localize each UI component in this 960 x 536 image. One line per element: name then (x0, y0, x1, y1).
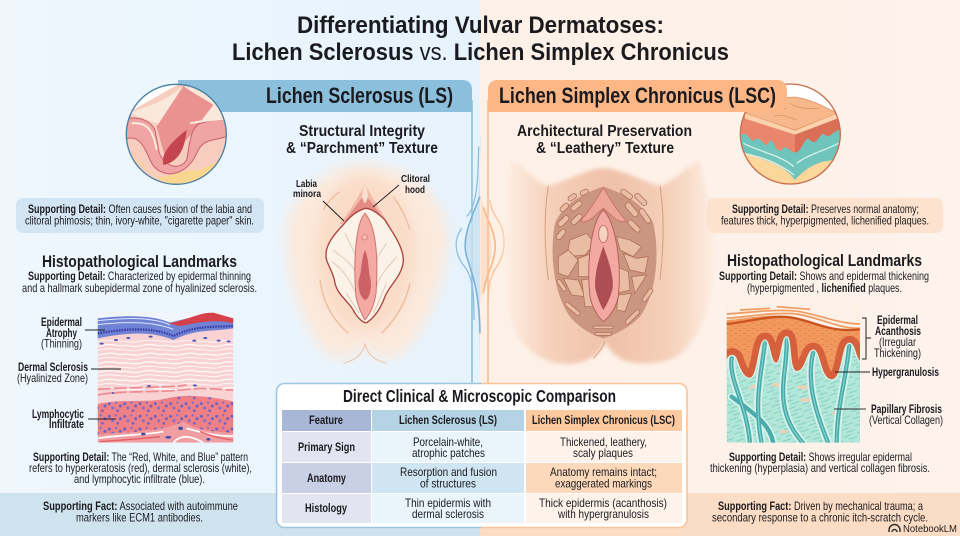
table row: anatomy: exaggerated markings (555, 476, 652, 490)
text block: hyperplasia detail: Supporting Detail: Shows irregular epidermal (729, 450, 912, 464)
table row: histology: with hypergranulosis (557, 507, 649, 521)
table row: histology: dermal sclerosis (412, 507, 484, 521)
labels: labia minora and clitoral hood: Clitoral (401, 173, 430, 185)
background: left blue half (0, 0, 480, 536)
table row: primary sign: Thickened, leathery, (560, 435, 647, 449)
text block: red white and blue pattern (29, 450, 252, 486)
table header row: Lichen Simplex Chronicus (LSC) (532, 413, 675, 427)
callout: LSC supporting detail (707, 198, 943, 233)
icon: Lichen Simplex Chronicus tissue circle (740, 84, 842, 187)
heading: LSC histopathological landmarks: (hyperpigmented , lichenified plaques. (747, 281, 902, 295)
labels: LS histology callouts: Lymphocytic (32, 407, 84, 421)
table row: primary sign: Porcelain-white, (413, 435, 483, 449)
labels: labia minora and clitoral hood (293, 173, 430, 221)
subheading: parchment texture: & “Parchment” Texture (286, 140, 438, 157)
background: right peach half (480, 0, 960, 536)
labels: LS histology callouts: Dermal Sclerosis (18, 360, 88, 374)
header: Lichen Simplex Chronicus: Lichen Simplex Chronicus (LSC) (499, 83, 776, 108)
illustration: Lichen Sclerosus anatomy schematic (286, 163, 447, 363)
labels: LS histology callouts: Infiltrate (49, 417, 84, 431)
table row: anatomy: of structures (420, 476, 476, 490)
subheading: parchment texture: Structural Integrity (299, 123, 425, 140)
illustration: Lichen Simplex Chronicus anatomy schematic (505, 160, 715, 364)
centre divider waves (456, 137, 504, 367)
title: Differentiating Vulvar Dermatoses: (297, 12, 664, 39)
table title: Direct Clinical & Microscopic Comparison (343, 386, 616, 406)
chart: LS histology section (98, 313, 233, 443)
table row: primary sign (282, 432, 682, 462)
text block: red white and blue pattern: refers to hyperkeratosis (red), dermal sclerosis (white), (29, 461, 252, 475)
table row: histology (282, 494, 682, 523)
text block: LS supporting fact: markers like ECM1 antibodies. (76, 510, 203, 524)
text block: LSC supporting fact (712, 499, 928, 524)
labels: LS histology callouts: (Thinning) (41, 336, 82, 350)
text block: red white and blue pattern: Supporting Detail: The “Red, White, and Blue” pattern (33, 450, 248, 464)
heading: LS histopathological landmarks: Histopathological Landmarks (42, 252, 237, 271)
footer band: Lichen Sclerosus (0, 493, 480, 536)
table row: histology: Thin epidermis with (405, 496, 491, 510)
text block: hyperplasia detail (710, 450, 930, 475)
table row: anatomy: Resorption and fusion (400, 465, 497, 479)
callout: LS supporting detail: Supporting Detail: Often causes fusion of the labia and (28, 202, 252, 216)
table row: anatomy (282, 463, 682, 493)
text block: LS supporting fact (43, 499, 238, 524)
labels: labia minora and clitoral hood: hood (405, 184, 425, 196)
icon: Lichen Sclerosus tissue circle (123, 83, 230, 187)
text block: LSC supporting fact: Supporting Fact: Driven by mechanical trauma; a (718, 499, 923, 513)
callout: LSC supporting detail: Supporting Detail: Preserves normal anatomy; (732, 202, 919, 216)
table row: primary sign: atrophic patches (412, 446, 485, 460)
heading: LSC histopathological landmarks (719, 251, 929, 295)
subheading: leathery texture: & “Leathery” Texture (536, 140, 674, 157)
table row: anatomy: Anatomy (307, 471, 346, 485)
panel: Lichen Simplex Chronicus centre (488, 80, 787, 384)
title (232, 12, 729, 66)
panel: Lichen Sclerosus centre (178, 80, 472, 384)
table row: primary sign: Primary Sign (298, 440, 355, 454)
labels: LSC histology callouts: Acanthosis (875, 324, 921, 338)
labels: LS histology callouts: Atrophy (46, 326, 77, 340)
labels: labia minora and clitoral hood: Labia (296, 178, 317, 190)
header: Lichen Simplex Chronicus (488, 80, 787, 112)
chart: LSC histology section (727, 305, 860, 443)
title: Lichen Sclerosus vs. Lichen Simplex Chronicus (232, 39, 729, 66)
labels: labia minora and clitoral hood: minora (293, 188, 321, 200)
text block: LS supporting fact: Supporting Fact: Associated with autoimmune (43, 499, 238, 513)
subheading: leathery texture (517, 123, 692, 157)
footer band: Lichen Simplex Chronicus (480, 493, 960, 536)
panel: comparison table (276, 384, 687, 528)
heading: LS histopathological landmarks (22, 252, 257, 295)
subheading: leathery texture: Architectural Preservation (517, 123, 692, 140)
labels: LS histology callouts: Epidermal (41, 315, 82, 329)
table row: histology: Histology (305, 501, 347, 515)
subheading: parchment texture (286, 123, 438, 157)
heading: LS histopathological landmarks: Supporting Detail: Characterized by epidermal thinning (28, 269, 251, 283)
table row: primary sign: scaly plaques (573, 446, 633, 460)
labels: LS histology callouts: (Hyalinized Zone) (17, 371, 88, 385)
table header row: Feature (309, 413, 343, 427)
table row: anatomy: Anatomy remains intact; (550, 465, 657, 479)
labels: LSC histology callouts (834, 313, 943, 427)
labels: LSC histology callouts: Thickening) (874, 346, 921, 360)
labels: LS histology callouts (17, 315, 121, 431)
table row: histology: Thick epidermis (acanthosis) (539, 496, 667, 510)
table header row (282, 410, 682, 431)
heading: LS histopathological landmarks: and a hallmark subepidermal zone of hyalinized sclerosis. (22, 281, 257, 295)
text block: red white and blue pattern: and lymphocytic infiltrate (blue). (74, 472, 205, 486)
labels: LSC histology callouts: (Irregular (879, 335, 916, 349)
header: Lichen Sclerosus: Lichen Sclerosus (LS) (266, 83, 453, 108)
labels: LSC histology callouts: Epidermal (877, 313, 918, 327)
callout: LS supporting detail: clitoral phimosis; thin, ivory-white, "cigarette paper" skin. (25, 214, 254, 228)
callout: LS supporting detail (16, 198, 264, 233)
header: Lichen Sclerosus (178, 80, 472, 112)
heading: LSC histopathological landmarks: Histopathological Landmarks (727, 251, 922, 270)
table header row: Lichen Sclerosus (LS) (399, 413, 497, 427)
